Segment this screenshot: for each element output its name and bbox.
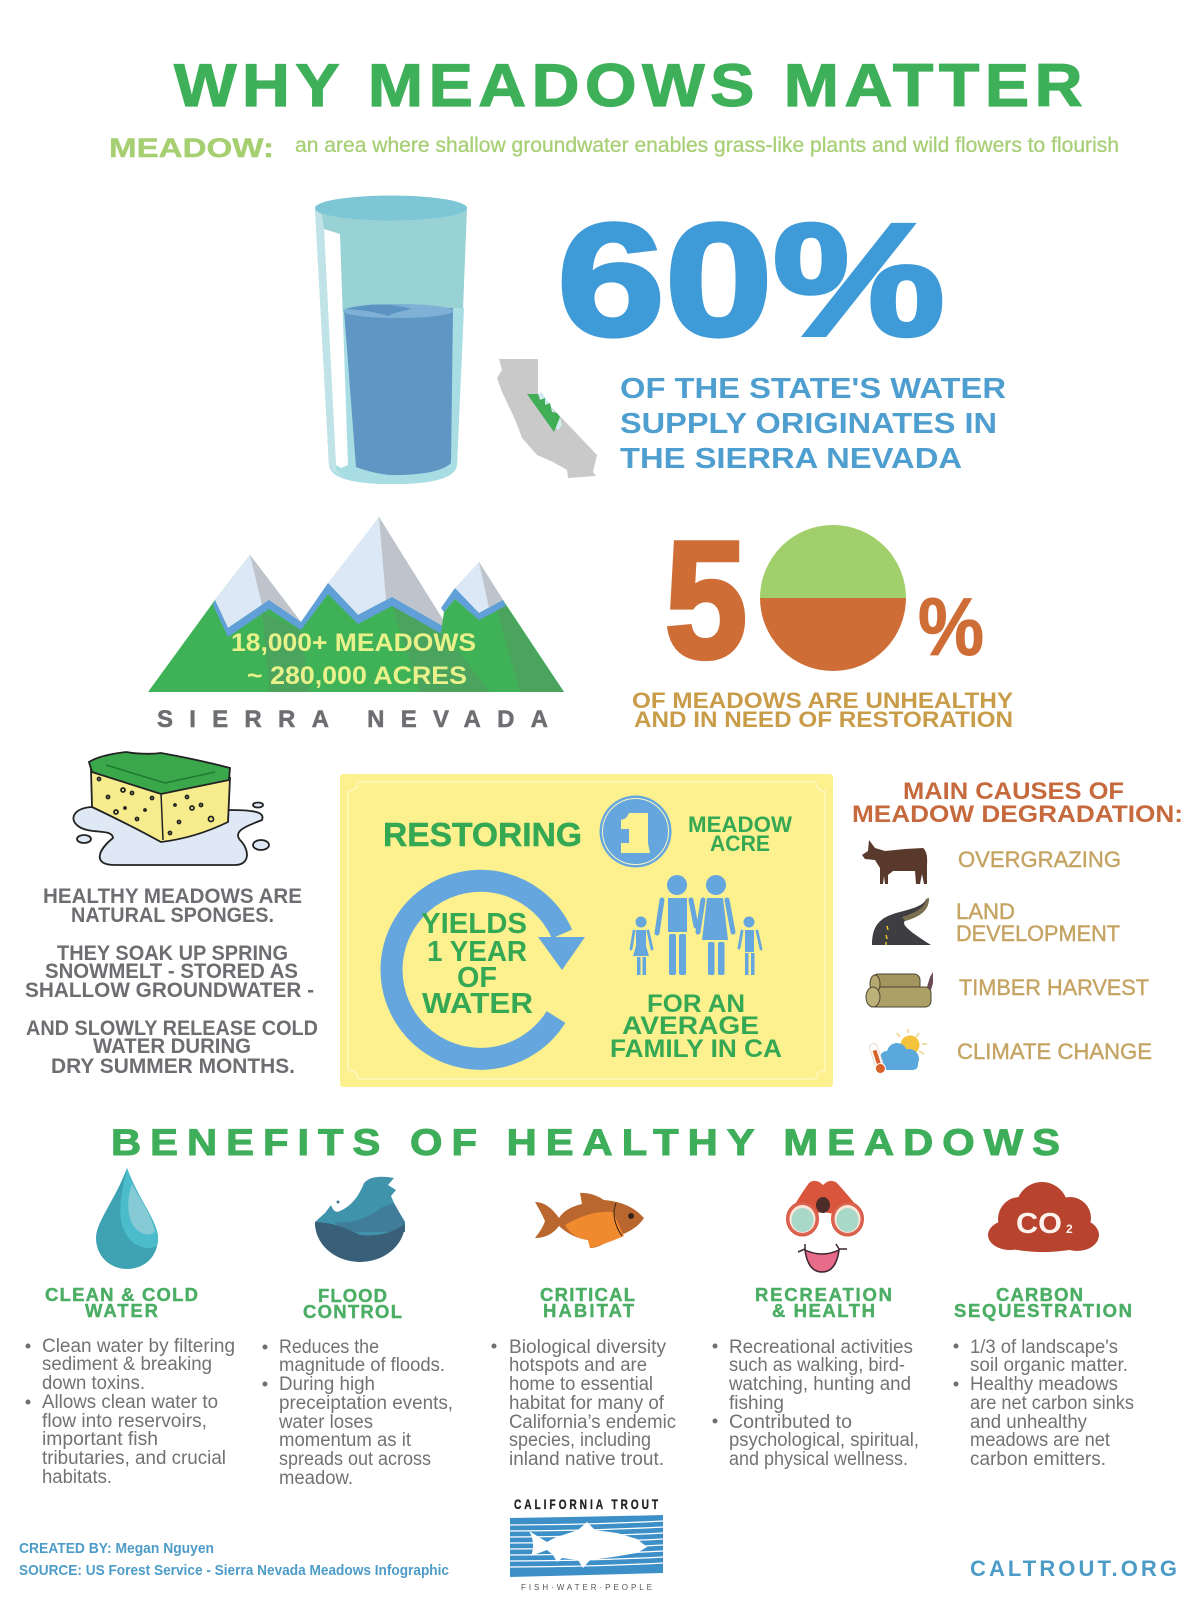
icon: CO2 cloud: CO bbox=[1016, 1208, 1062, 1240]
icon: number one badge bbox=[600, 796, 672, 868]
unhealthy meadows caption: AND IN NEED OF RESTORATION bbox=[634, 707, 1013, 732]
bullet list: magnitude of floods. bbox=[279, 1355, 445, 1376]
heading: CONTROL bbox=[303, 1301, 402, 1322]
bullet list: are net carbon sinks bbox=[970, 1393, 1134, 1414]
bullet list: Allows clean water to bbox=[42, 1392, 218, 1413]
credits: CREATED BY: Megan Nguyen bbox=[19, 1540, 214, 1557]
logo tagline: FISH·WATER·PEOPLE bbox=[521, 1583, 652, 1592]
bullet list: important fish bbox=[42, 1429, 158, 1450]
bullet list bbox=[712, 1337, 919, 1470]
cause: climate change: CLIMATE CHANGE bbox=[957, 1039, 1152, 1064]
cause: timber harvest: TIMBER HARVEST bbox=[959, 975, 1149, 1000]
logo emblem bbox=[510, 1515, 663, 1577]
average family label: AVERAGE bbox=[622, 1012, 759, 1040]
bullet list: flow into reservoirs, bbox=[42, 1411, 207, 1432]
benefit: carbon sequestration bbox=[954, 1182, 1134, 1470]
bullet list: momentum as it bbox=[279, 1430, 412, 1451]
bullet list bbox=[492, 1337, 676, 1470]
bullet list: California’s endemic bbox=[509, 1412, 676, 1433]
heading bbox=[755, 1284, 892, 1321]
website: CALTROUT.ORG bbox=[970, 1556, 1177, 1581]
cause: overgrazing bbox=[862, 840, 1121, 884]
average family label bbox=[610, 990, 782, 1063]
yields one year of water: WATER bbox=[422, 988, 533, 1020]
bullet list: 1/3 of landscape's bbox=[970, 1337, 1118, 1358]
water supply caption: SUPPLY ORIGINATES IN bbox=[620, 408, 997, 440]
bullet list: habitats. bbox=[42, 1467, 112, 1488]
heading: CLEAN & COLD bbox=[45, 1284, 198, 1305]
cause: land development: DEVELOPMENT bbox=[956, 921, 1120, 946]
digit 5: 5 bbox=[665, 508, 747, 693]
sponge explanation text: WATER DURING bbox=[93, 1035, 251, 1058]
logo: California Trout bbox=[510, 1496, 663, 1592]
stat: 50 percent bbox=[665, 508, 984, 693]
unhealthy meadows caption: OF MEADOWS ARE UNHEALTHY bbox=[632, 688, 1013, 713]
heading bbox=[540, 1284, 635, 1321]
half pie bbox=[760, 525, 906, 671]
bullet list: soil organic matter. bbox=[970, 1355, 1128, 1376]
meadow definition bbox=[109, 133, 1119, 163]
cause: land development bbox=[872, 898, 1120, 946]
bullet list: carbon emitters. bbox=[970, 1449, 1106, 1470]
icon: cow bbox=[862, 840, 927, 884]
water supply caption: OF THE STATE'S WATER bbox=[620, 373, 1006, 405]
heading: main causes bbox=[852, 778, 1183, 828]
bullet list: meadows are net bbox=[970, 1430, 1111, 1451]
bullet list: Healthy meadows bbox=[970, 1374, 1118, 1395]
icon: fish bbox=[535, 1193, 644, 1248]
cause: land development: LAND bbox=[956, 899, 1015, 924]
bullet list: During high bbox=[279, 1374, 375, 1395]
benefit: clean and cold water bbox=[26, 1168, 235, 1488]
bullet list: Clean water by filtering bbox=[42, 1336, 235, 1357]
icon: water drop bbox=[96, 1168, 158, 1269]
bullet list: water loses bbox=[278, 1412, 373, 1433]
meadow count: 18,000+ MEADOWS bbox=[231, 629, 476, 657]
heading: SEQUESTRATION bbox=[954, 1300, 1132, 1321]
credits: SOURCE: US Forest Service - Sierra Nevada Meadows Infographic bbox=[19, 1562, 449, 1579]
sponge explanation text: NATURAL SPONGES. bbox=[71, 904, 274, 927]
yields one year of water bbox=[421, 908, 533, 1020]
bullet list: Contributed to bbox=[729, 1412, 852, 1433]
benefit: critical habitat bbox=[492, 1193, 676, 1470]
bullet list: meadow. bbox=[279, 1468, 353, 1489]
stat: 60 percent: 60% bbox=[557, 190, 945, 369]
sponge explanation text: HEALTHY MEADOWS ARE bbox=[43, 885, 302, 908]
sponge explanation text: DRY SUMMER MONTHS. bbox=[51, 1055, 295, 1078]
icon: family bbox=[631, 875, 761, 975]
meadow acre label bbox=[688, 812, 792, 856]
sponge explanation text: THEY SOAK UP SPRING bbox=[57, 942, 288, 965]
heading: CARBON bbox=[996, 1284, 1083, 1305]
meadow acre label: ACRE bbox=[710, 831, 770, 856]
sponge explanation text: AND SLOWLY RELEASE COLD bbox=[26, 1017, 318, 1040]
icon: wet sponge bbox=[73, 752, 269, 865]
restoring label: RESTORING bbox=[383, 816, 582, 853]
yields one year of water: 1 YEAR bbox=[427, 936, 527, 968]
icon: weather and thermometer bbox=[868, 1029, 927, 1075]
cause: climate change bbox=[868, 1029, 1152, 1075]
sponge explanation text: SHALLOW GROUNDWATER - bbox=[25, 979, 314, 1002]
bullet list: such as walking, bird- bbox=[729, 1355, 905, 1376]
panel: restoring one meadow acre bbox=[340, 774, 833, 1087]
bullet list: watching, hunting and bbox=[728, 1374, 911, 1395]
yields one year of water: OF bbox=[457, 962, 497, 994]
bullet list: hotspots and are bbox=[509, 1355, 647, 1376]
bullet list: spreads out across bbox=[279, 1449, 431, 1470]
bullet list bbox=[262, 1337, 453, 1489]
unhealthy meadows caption bbox=[632, 688, 1013, 732]
cause: timber harvest bbox=[866, 972, 1149, 1007]
average family label: FOR AN bbox=[647, 990, 745, 1018]
sponge explanation text bbox=[25, 885, 318, 1078]
water supply caption: THE SIERRA NEVADA bbox=[620, 443, 962, 475]
sponge explanation text: SNOWMELT - STORED AS bbox=[45, 960, 298, 983]
icon: winding road bbox=[872, 898, 931, 945]
bullet list: inland native trout. bbox=[509, 1449, 664, 1470]
bullet list: and unhealthy bbox=[970, 1412, 1087, 1433]
Sierra Nevada label: SIERRA NEVADA bbox=[157, 706, 548, 733]
definition text: an area where shallow groundwater enables grass-like plants and wild flowers to flourish bbox=[295, 134, 1119, 157]
benefit: recreation and health bbox=[712, 1181, 919, 1470]
heading: WATER bbox=[85, 1300, 158, 1321]
benefit: flood control bbox=[262, 1177, 453, 1489]
bullet list: Reduces the bbox=[279, 1337, 379, 1358]
icon: California map bbox=[497, 359, 597, 478]
heading: CRITICAL bbox=[540, 1284, 635, 1305]
bullet list: tributaries, and crucial bbox=[42, 1448, 226, 1469]
heading bbox=[303, 1285, 402, 1322]
bullet list: Recreational activities bbox=[729, 1337, 913, 1358]
bullet list bbox=[954, 1337, 1134, 1470]
yields one year of water: YIELDS bbox=[421, 908, 527, 940]
bullet list: habitat for many of bbox=[509, 1393, 665, 1414]
bullet list: fishing bbox=[729, 1393, 784, 1414]
heading bbox=[954, 1284, 1132, 1321]
bullet list: preceiptation events, bbox=[279, 1393, 453, 1414]
title: WHY MEADOWS MATTER bbox=[174, 52, 1088, 119]
heading bbox=[45, 1284, 198, 1321]
icon: CO2 cloud: 2 bbox=[1066, 1222, 1073, 1236]
heading: RECREATION bbox=[755, 1284, 892, 1305]
bullet list: down toxins. bbox=[42, 1373, 145, 1394]
bullet list: home to essential bbox=[509, 1374, 653, 1395]
cause: overgrazing: OVERGRAZING bbox=[958, 847, 1121, 872]
average family label: FAMILY IN CA bbox=[610, 1035, 782, 1063]
heading: FLOOD bbox=[318, 1285, 387, 1306]
bullet list bbox=[26, 1336, 235, 1488]
heading: & HEALTH bbox=[772, 1300, 875, 1321]
icon: CO2 cloud bbox=[988, 1182, 1099, 1252]
bullet list: species, including bbox=[509, 1430, 651, 1451]
bullet list: Biological diversity bbox=[509, 1337, 666, 1358]
credits bbox=[19, 1540, 449, 1579]
icon: binoculars with smile bbox=[786, 1181, 864, 1272]
water supply caption bbox=[620, 373, 1006, 475]
icon: glass of water bbox=[315, 196, 467, 484]
arrow: water cycle bbox=[392, 881, 585, 1059]
heading: main causes: MAIN CAUSES OF bbox=[903, 778, 1124, 805]
bullet list: psychological, spiritual, bbox=[729, 1430, 919, 1451]
definition term: MEADOW: bbox=[109, 133, 274, 163]
percent sign: % bbox=[918, 582, 984, 673]
heading: benefits: BENEFITS OF HEALTHY MEADOWS bbox=[111, 1122, 1069, 1163]
meadow acre label: MEADOW bbox=[688, 812, 792, 837]
bullet list: sediment & breaking bbox=[42, 1354, 212, 1375]
icon: mountains bbox=[148, 517, 564, 692]
icon: logs bbox=[866, 972, 933, 1007]
heading: main causes: MEADOW DEGRADATION: bbox=[852, 801, 1183, 828]
logo name: CALIFORNIA TROUT bbox=[514, 1496, 661, 1512]
icon: wave bbox=[315, 1177, 405, 1262]
acreage: ~ 280,000 ACRES bbox=[247, 662, 467, 690]
heading: HABITAT bbox=[543, 1300, 635, 1321]
bullet list: and physical wellness. bbox=[729, 1449, 908, 1470]
